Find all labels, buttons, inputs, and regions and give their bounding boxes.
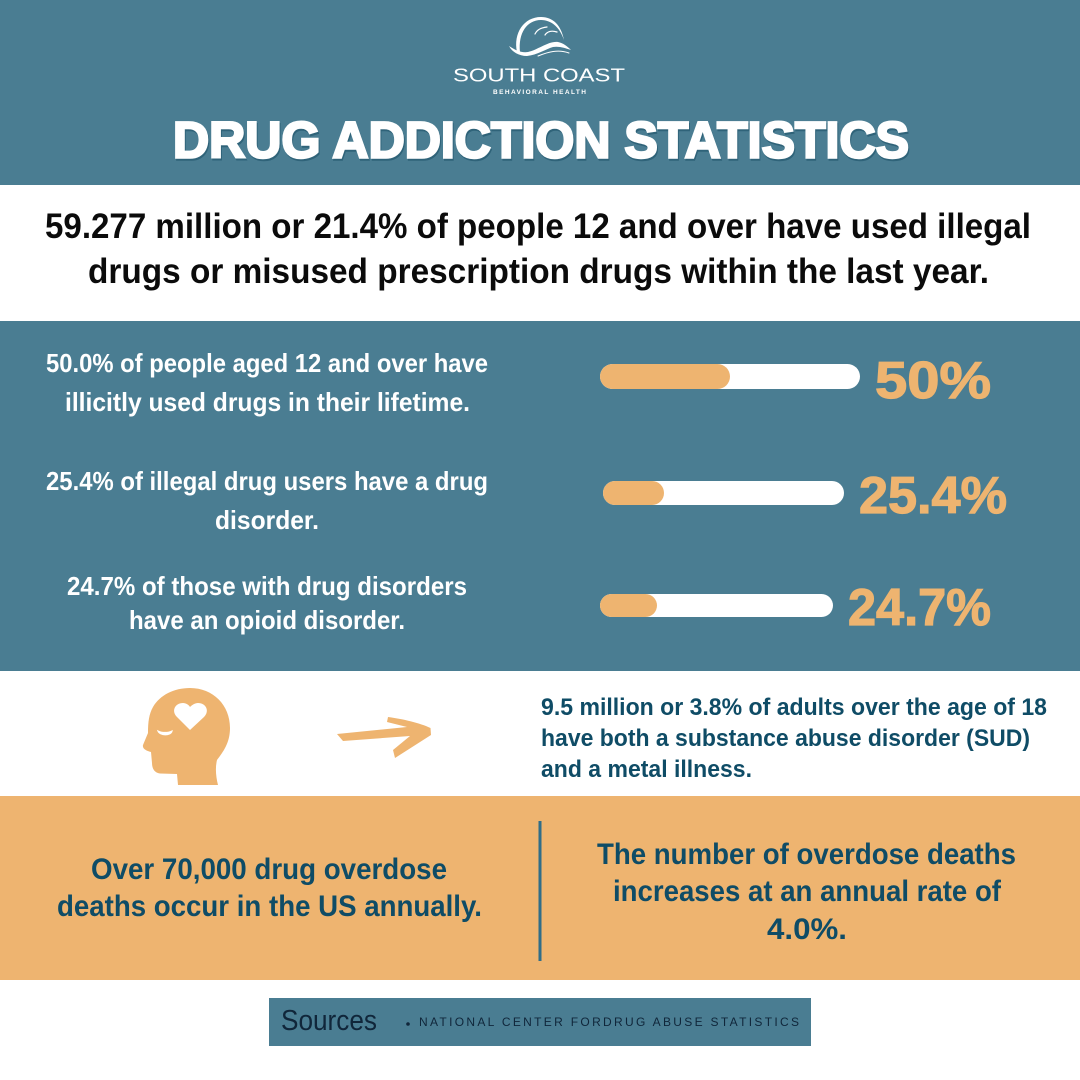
value: 24.7%: 24.7% — [848, 579, 991, 637]
value: 25.4%: 25.4% — [859, 467, 1007, 525]
co-occurring disorder text: 9.5 million or 3.8% of adults over the age of 18 — [541, 694, 1047, 721]
stat text: 25.4% drug disorder: 25.4% of illegal drug users have a drug — [46, 466, 488, 496]
value: 50%: 50% — [875, 352, 991, 410]
logo wordmark: SOUTH COAST — [453, 66, 625, 86]
stat text: 24.7% opioid disorder — [67, 571, 467, 635]
overdose deaths text: Over 70,000 drug overdose — [91, 853, 447, 886]
headline text block: 59.277 million or 21.4% of people 12 and over have used illegal — [45, 207, 1031, 246]
title: DRUG ADDICTION STATISTICS — [174, 114, 910, 170]
stat text: 25.4% drug disorder — [46, 466, 488, 535]
source item: NATIONAL CENTER FORDRUG ABUSE STATISTICS — [419, 1015, 799, 1029]
progress bar: 25.4% — [603, 481, 844, 505]
overdose deaths text — [57, 853, 482, 923]
sources box — [269, 998, 811, 1046]
co-occurring disorder text: and a metal illness. — [541, 756, 752, 783]
co-occurring disorder text: have both a substance abuse disorder (SUD) — [541, 725, 1030, 752]
stat text: 24.7% opioid disorder: 24.7% of those with drug disorders — [67, 571, 467, 601]
panel: header — [0, 0, 1080, 185]
overdose deaths text: deaths occur in the US annually. — [57, 890, 482, 923]
title: DRUG ADDICTION STATISTICS — [173, 112, 909, 168]
annual increase text — [597, 838, 1016, 946]
stat text: 24.7% opioid disorder: have an opioid disorder. — [129, 605, 405, 635]
stat text: 50.0% lifetime use: 50.0% of people aged 12 and over have — [46, 348, 488, 378]
stat text: 50.0% lifetime use — [46, 348, 488, 417]
arrow — [337, 717, 431, 758]
panel: statistics — [0, 321, 1080, 671]
co-occurring disorder text — [541, 694, 1047, 783]
icon: South Coast logo — [509, 17, 571, 56]
sources label: Sources — [281, 1005, 377, 1037]
annual increase text: 4.0%. — [767, 913, 847, 946]
annual increase text: The number of overdose deaths — [597, 838, 1016, 871]
icon: head with heart — [143, 688, 230, 785]
annual increase text: increases at an annual rate of — [613, 875, 1002, 908]
logo tagline: BEHAVIORAL HEALTH — [493, 89, 586, 96]
progress bar: 24.7% — [600, 594, 833, 617]
headline text block: drugs or misused prescription drugs within the last year. — [88, 252, 989, 291]
headline text block — [45, 207, 1031, 291]
progress bar: 50% — [600, 364, 860, 389]
panel: overdose facts — [0, 796, 1080, 980]
stat text: 50.0% lifetime use: illicitly used drugs in their lifetime. — [65, 387, 470, 417]
stat text: 25.4% drug disorder: disorder. — [215, 505, 319, 535]
